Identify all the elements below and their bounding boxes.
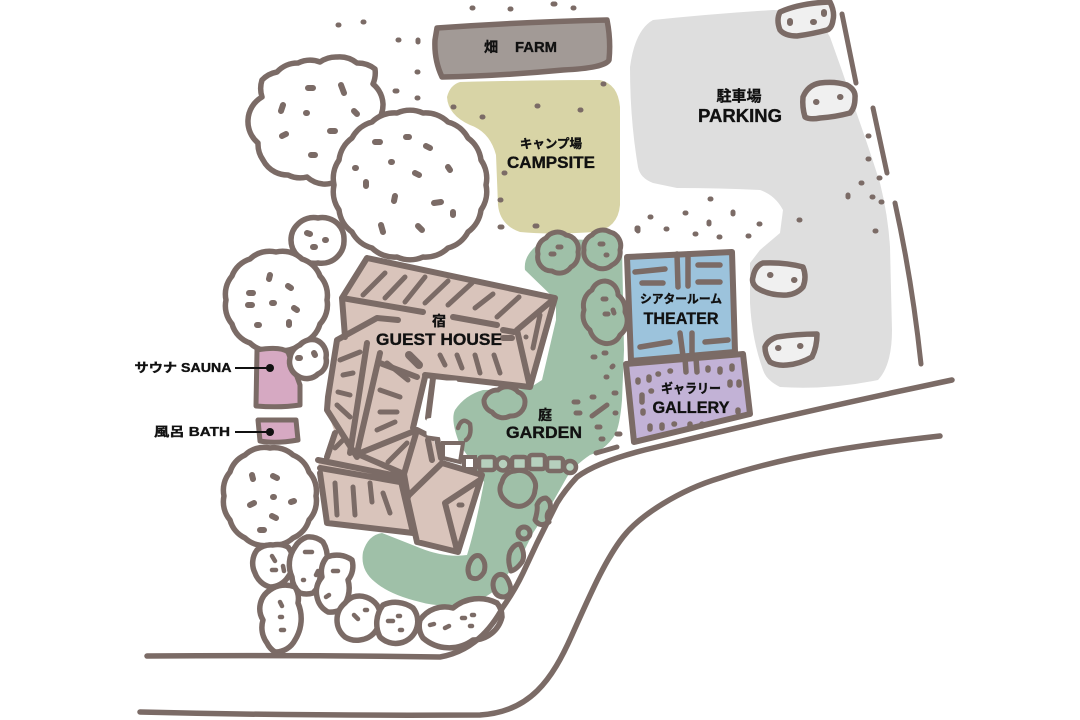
garden label: 庭 — [538, 407, 552, 423]
sauna label — [134, 361, 274, 375]
sauna label: サウナ SAUNA — [134, 361, 232, 375]
gallery building: GALLERY — [652, 398, 730, 417]
theater building — [627, 252, 735, 361]
campsite area — [447, 80, 620, 234]
trees — [223, 57, 487, 546]
farm: FARM — [515, 39, 557, 56]
farm: 畑 — [484, 39, 498, 55]
theater building: シアタールーム — [640, 292, 722, 306]
garden label: GARDEN — [506, 423, 582, 442]
courtyard bush — [458, 421, 470, 440]
bath label: 風呂 BATH — [154, 425, 230, 439]
roads — [140, 380, 952, 715]
parking label: PARKING — [698, 106, 782, 126]
guest house label: 宿 — [432, 313, 446, 329]
garden area — [362, 239, 624, 605]
campsite label: CAMPSITE — [507, 154, 595, 172]
guest house label — [376, 313, 502, 349]
campsite label: キャンプ場 — [520, 136, 583, 151]
roof fill — [318, 258, 555, 552]
cars — [752, 2, 855, 365]
garden label — [506, 407, 582, 442]
farm — [435, 20, 610, 77]
garden path stones — [479, 455, 576, 473]
guest house — [318, 258, 555, 552]
parking label — [698, 87, 782, 126]
garden bushes — [468, 230, 627, 597]
roof tile strokes — [335, 273, 540, 515]
small bush by sauna — [290, 340, 326, 379]
courtyard patio — [443, 443, 463, 462]
scattered dots — [338, 4, 882, 237]
campsite label — [507, 136, 595, 172]
bottom bushes — [253, 537, 502, 652]
parking area — [630, 10, 892, 388]
guest house label: GUEST HOUSE — [376, 330, 502, 349]
white flower shrubs — [428, 382, 458, 436]
parking label: 駐車場 — [716, 87, 762, 105]
bath label — [154, 425, 274, 439]
white stepping stone — [464, 457, 475, 469]
gallery building: ギャラリー — [661, 381, 721, 396]
theater building: THEATER — [644, 309, 718, 328]
parking fences — [842, 14, 921, 364]
roof outlines — [318, 258, 555, 552]
bath building — [258, 420, 298, 442]
gallery building — [626, 354, 750, 442]
sauna building — [256, 348, 300, 407]
